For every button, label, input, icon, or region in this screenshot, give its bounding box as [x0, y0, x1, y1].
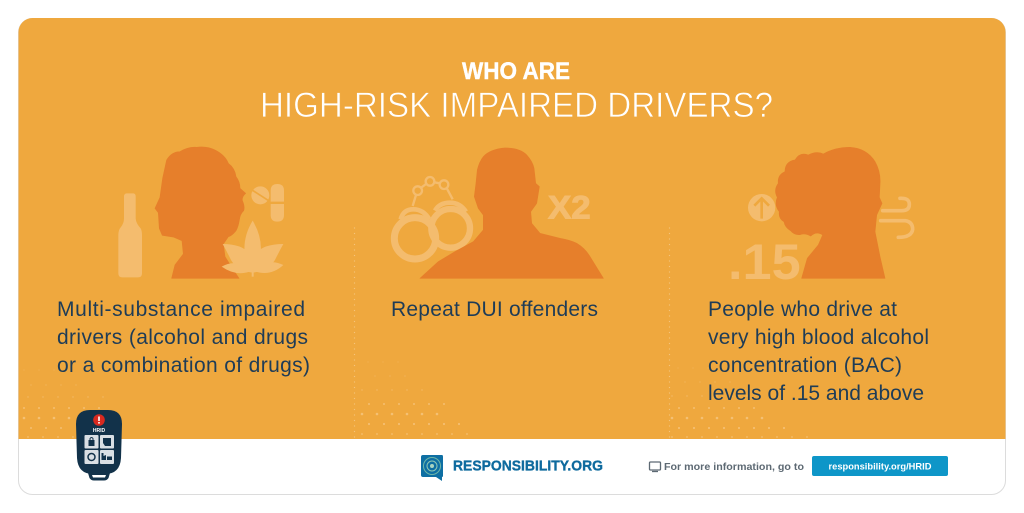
icon: pills: [251, 184, 284, 222]
text: repeat offenders: Repeat DUI offenders: [391, 298, 598, 321]
button: URL: [812, 456, 948, 476]
title: [260, 58, 773, 125]
icon: bottle: [118, 193, 142, 277]
more information link: For more information, go to: [664, 461, 804, 473]
text: high BAC description: very high blood alcohol: [708, 326, 929, 349]
text: multi-substance description: drivers (alcohol and drugs: [57, 326, 308, 349]
title: HIGH-RISK IMPAIRED DRIVERS?: [260, 85, 773, 125]
text: high BAC description: People who drive at: [708, 298, 897, 321]
text: high BAC description: concentration (BAC): [708, 354, 902, 377]
text: high BAC description: levels of .15 and above: [708, 382, 924, 405]
panel: repeat DUI offenders: [391, 148, 603, 321]
silhouette: person in profile: [155, 147, 246, 278]
icon: key fob: HRID: [93, 428, 105, 434]
text: multi-substance description: or a combination of drugs): [57, 354, 310, 377]
illustration: person with handcuffs and x2: [394, 148, 603, 278]
title: WHO ARE: [462, 58, 570, 85]
icon: breath: [881, 198, 913, 237]
label: .15: .15: [728, 234, 801, 290]
more information link: [650, 456, 948, 476]
logo: Responsibility.org: RESPONSIBILITY.ORG: [453, 458, 603, 474]
illustration: profile with alcohol, pills and cannabis: [118, 147, 284, 278]
button: URL: responsibility.org/HRID: [828, 462, 932, 472]
icon: speech bubble target: [421, 455, 443, 481]
silhouette: bald person: [420, 148, 603, 278]
panel: high BAC drivers: [708, 147, 929, 405]
panel: multi-substance impaired drivers: [57, 147, 310, 377]
text: high BAC description: [708, 298, 929, 405]
logo: Responsibility.org: [421, 455, 603, 481]
icon: up arrow: [748, 194, 775, 221]
icon: handcuffs: [394, 177, 470, 259]
illustration: person with .15 BAC: [728, 147, 913, 290]
silhouette: person with curly hair: [776, 147, 885, 278]
label: x2: X2: [548, 189, 591, 225]
icon: monitor: [650, 462, 660, 472]
orange panel: [18, 18, 1006, 439]
icon: cannabis leaf: [222, 221, 283, 277]
icon: key fob: [76, 410, 122, 480]
text: multi-substance description: Multi-substance impaired: [57, 298, 305, 321]
text: multi-substance description: [57, 298, 310, 377]
